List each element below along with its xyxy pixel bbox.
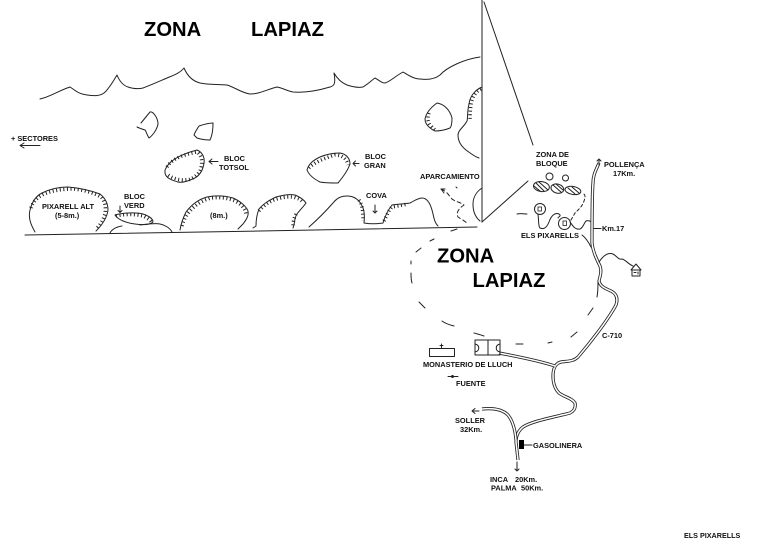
title: zona lapiaz top — [144, 19, 324, 41]
label: bloc gran — [353, 152, 387, 170]
small rocks — [137, 112, 213, 140]
label: c-710: C-710 — [602, 331, 622, 340]
rock: bloc gran — [307, 152, 387, 183]
rock: bloc totsol — [165, 150, 249, 182]
label: zona de bloque — [536, 150, 569, 168]
label: bloc verd: BLOC — [124, 192, 146, 201]
label: pollença: 17Km. — [613, 169, 635, 178]
icon: gasolinera: GASOLINERA — [533, 441, 583, 450]
icons: pixarells sites and trail — [534, 193, 592, 230]
title: zona lapiaz map — [437, 246, 545, 292]
icon: monastery — [430, 344, 454, 356]
base line — [25, 227, 477, 235]
label: inca palma: 50Km. — [521, 484, 543, 492]
icons: boulders — [533, 173, 581, 196]
label: els pixarells: ELS PIXARELLS — [521, 231, 579, 240]
arrowhead of parking path — [441, 189, 445, 193]
label: inca palma: 20Km. — [515, 475, 537, 484]
label: soller: 32Km. — [460, 425, 482, 434]
title: zona lapiaz map: LAPIAZ — [472, 270, 545, 292]
icon: football field — [475, 340, 500, 355]
side line to road — [582, 235, 591, 247]
title: zona lapiaz top: ZONA — [144, 19, 202, 41]
title: zona lapiaz map: ZONA — [437, 246, 495, 268]
dashed path from aparcamiento — [441, 189, 468, 224]
road: main c-710 — [516, 163, 617, 460]
vertical divider and diagonals — [482, 0, 533, 222]
label: pixarell alt: PIXARELL ALT — [42, 202, 94, 211]
label: inca palma: INCA — [490, 475, 509, 484]
label: km 17: Km.17 — [602, 224, 624, 233]
label: pollença — [597, 159, 645, 178]
label: monasterio: MONASTERIO DE LLUCH — [423, 360, 513, 369]
sectores label and arrow: + SECTORES — [11, 134, 58, 143]
rock: pixarell alt — [29, 187, 108, 232]
caption: ELS PIXARELLS — [684, 531, 741, 540]
label: bloc gran: BLOC — [365, 152, 387, 161]
rock: upper right — [458, 87, 482, 158]
rock: egg — [425, 103, 452, 131]
rock: bloc verd — [110, 192, 172, 233]
label: inca palma: PALMA — [491, 484, 517, 492]
label: bloc totsol: BLOC — [224, 154, 246, 163]
label: cova: COVA — [366, 191, 387, 200]
label: zona de bloque: ZONA DE — [536, 150, 569, 159]
label: bloc totsol — [209, 154, 249, 172]
road: to monastery — [499, 353, 555, 366]
dash near top — [517, 213, 527, 215]
ridge line — [40, 57, 480, 99]
label: pixarell alt — [42, 202, 94, 220]
label: bloc verd — [118, 192, 146, 212]
title: zona lapiaz top: LAPIAZ — [251, 19, 324, 41]
label: bloc totsol: TOTSOL — [219, 163, 249, 172]
sectores label and arrow — [11, 134, 58, 148]
label: pixarell alt: (5-8m.) — [55, 211, 80, 220]
label: aparcamiento: APARCAMIENTO — [420, 172, 480, 181]
dashed zone boundary — [411, 229, 598, 344]
label: aparcamiento — [420, 172, 480, 188]
rock: 8m — [180, 196, 248, 230]
road: to soller — [482, 409, 516, 440]
label: soller: SOLLER — [455, 416, 486, 425]
arrow: south — [515, 462, 519, 471]
rock: cova — [309, 191, 438, 227]
path and icon: house — [599, 253, 641, 276]
label: pollença: POLLENÇA — [604, 160, 645, 169]
arrow: soller — [472, 408, 479, 414]
rock: right of base — [473, 188, 482, 221]
icon: gasolinera — [519, 440, 583, 450]
icon: fuente — [448, 375, 458, 378]
label: bloc verd: VERD — [124, 201, 145, 210]
label: inca palma — [490, 475, 543, 492]
label: fuente: FUENTE — [456, 379, 486, 388]
rock: middle — [253, 195, 306, 228]
label: 8m: (8m.) — [210, 211, 228, 220]
label: bloc gran: GRAN — [364, 161, 386, 170]
label: zona de bloque: BLOQUE — [536, 159, 568, 168]
label: soller — [455, 416, 486, 434]
